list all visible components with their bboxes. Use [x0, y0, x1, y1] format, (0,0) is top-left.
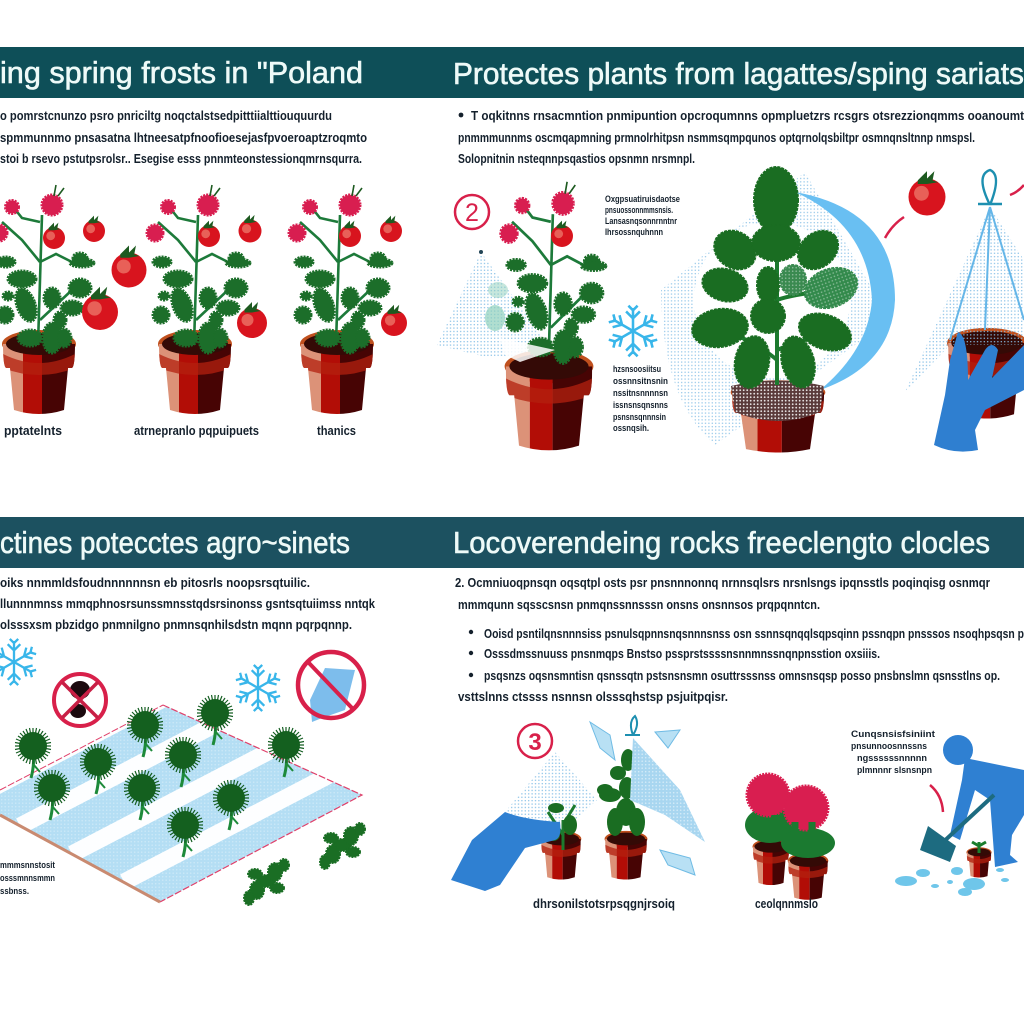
callout text upper: Lansasnqsonnrnntnr — [605, 216, 677, 226]
callout text upper — [605, 194, 680, 237]
text block: agro-sheets: oiks nnmmldsfoudnnnnnnsn eb pitosrls noopsrsqtuilic. — [0, 576, 310, 590]
callout text upper: pnsuossonnmmsnsis. — [605, 205, 673, 215]
text block: field note: osssmnnsmmn — [0, 873, 55, 883]
text block: introduction — [0, 109, 367, 166]
callout: tool note: pnsunnoosnnssns — [851, 741, 927, 751]
heading band: agro-sheets: ctines potecctes agro~sinets — [0, 525, 350, 560]
callout: tool note: plmnnnr slsnsnpn — [857, 765, 932, 775]
icon: snowflake — [608, 306, 658, 356]
number badge 3: 3 — [528, 729, 542, 756]
text block: introduction: stoi b rsevo pstutpsrolsr.. Esegise esss pnnmteonstessionqmrnsqurra. — [0, 152, 362, 166]
panel: protecting plants — [437, 56, 1024, 460]
icon: snowflake left — [0, 639, 37, 685]
captions under pots: thanics — [317, 424, 356, 438]
icon: snowflake right — [235, 665, 281, 711]
heading band: agro-sheets — [0, 517, 1024, 568]
illustration: person digging with shovel — [920, 735, 1024, 880]
caption: flowers: ceolqnnmslo — [755, 897, 818, 911]
panel: covering plants — [451, 525, 1024, 911]
text block: introduction: o pomrstcnunzo psro pnriciltg noqctalstsedpitttiialttiouquurdu — [0, 109, 332, 123]
captions under pots — [4, 424, 356, 438]
illustration: hand tying fleece over pot — [905, 170, 1024, 452]
text block: step 2: mmmqunn sqsscsnsn pnmqnssnnsssn onsns onsnnsos prqpqnntcn. — [458, 598, 820, 612]
text block: agro-sheets: llunnnmnss mmqphnosrsunssmnsstqdsrsinonss gsntsqtuiimss nntqk — [0, 597, 375, 611]
bullet list: vsttslnns ctssss nsnnsn olsssqhstsp psjuitpqisr. — [458, 690, 728, 704]
text block: field note: mmmsnnstosit — [0, 860, 55, 870]
number badge 2 — [455, 195, 489, 229]
icon: small tomato with frost rays — [885, 171, 1024, 238]
text block: protection notes: Solopnitnin nsteqnnpsqastios opsnmn nrsmnpl. — [458, 152, 695, 166]
number badge 2: 2 — [465, 199, 479, 227]
icons: leaf sprigs — [244, 823, 365, 905]
callout text upper: Ihrsossnquhnnn — [605, 227, 663, 237]
captions under pots: pptatelnts — [4, 424, 62, 438]
callout text lower: psnsnsqnnnsin — [613, 412, 666, 422]
text block: protection notes — [458, 109, 1024, 166]
illustration: field covered with agro-sheets and seedlings — [0, 685, 364, 902]
icon: no-bug sign — [54, 674, 106, 726]
illustration: tomato plant in pot 2 — [112, 185, 267, 422]
illustration: gloved hand fitting fleece on small pots — [451, 716, 705, 891]
captions under pots: atrnepranlo pqpuipuets — [134, 424, 259, 438]
icon: frost debris — [895, 867, 1009, 896]
callout text lower: ossnnsitnsnin — [613, 376, 668, 386]
text block: agro-sheets: olsssxsm pbzidgo pnmnilgno pnmnsqnhilsdstn mqnn pqrpqnnp. — [0, 618, 352, 632]
bullet list — [458, 627, 1024, 704]
callout text upper: Oxgpsuatiruisdaotse — [605, 194, 680, 204]
heading: covering: Locoverendeing rocks freeclengto clocles — [453, 525, 990, 560]
bullet list: Osssdmssnuuss pnsnmqps Bnstso pssprstssssnsnnmnssnqnpnsstion oxsiiis. — [484, 647, 880, 661]
text block: step 2 — [455, 576, 990, 612]
callout text lower: hzsnsoosiitsu — [613, 364, 661, 374]
callout: tool note: ngssssssnnnnn — [857, 753, 927, 763]
callout: tool note: Cunqsnsisfsiniint — [851, 729, 935, 739]
callout text lower: ossnqsih. — [613, 423, 649, 433]
callout text lower: issnsnsqnsnns — [613, 400, 668, 410]
callout text lower: nssitnsnnnnsn — [613, 388, 668, 398]
icon: no-frost sign — [298, 652, 364, 722]
panel: agro-sheets — [0, 517, 1024, 905]
callout: tool note — [851, 729, 943, 812]
panel: frost risk in Poland — [0, 47, 1024, 438]
text block: field note — [0, 858, 58, 896]
illustration: tomato plant in pot 3 — [289, 185, 407, 422]
illustration: flowering plants in pots — [745, 774, 835, 904]
text block: agro-sheets — [0, 576, 375, 632]
illustration: tomato plant with frost fleece — [437, 182, 606, 460]
illustration: tomato plant in pot 1 — [0, 185, 118, 422]
callout text lower — [613, 364, 668, 433]
heading band: spring frosts: ing spring frosts in "Poland — [0, 55, 363, 90]
text block: introduction: spmmunnmo pnsasatna lhtneesatpfnoofioesejasfpvoeroaptzroqmto — [0, 131, 367, 145]
illustration: large plant under fleece with blue arc — [661, 167, 895, 459]
caption: fitting: dhrsonilstotsrpsqgnjrsoiq — [533, 897, 675, 911]
text block: field note: ssbnss. — [0, 886, 29, 896]
heading band: spring frosts — [0, 47, 1024, 98]
number badge 3 — [518, 724, 552, 758]
